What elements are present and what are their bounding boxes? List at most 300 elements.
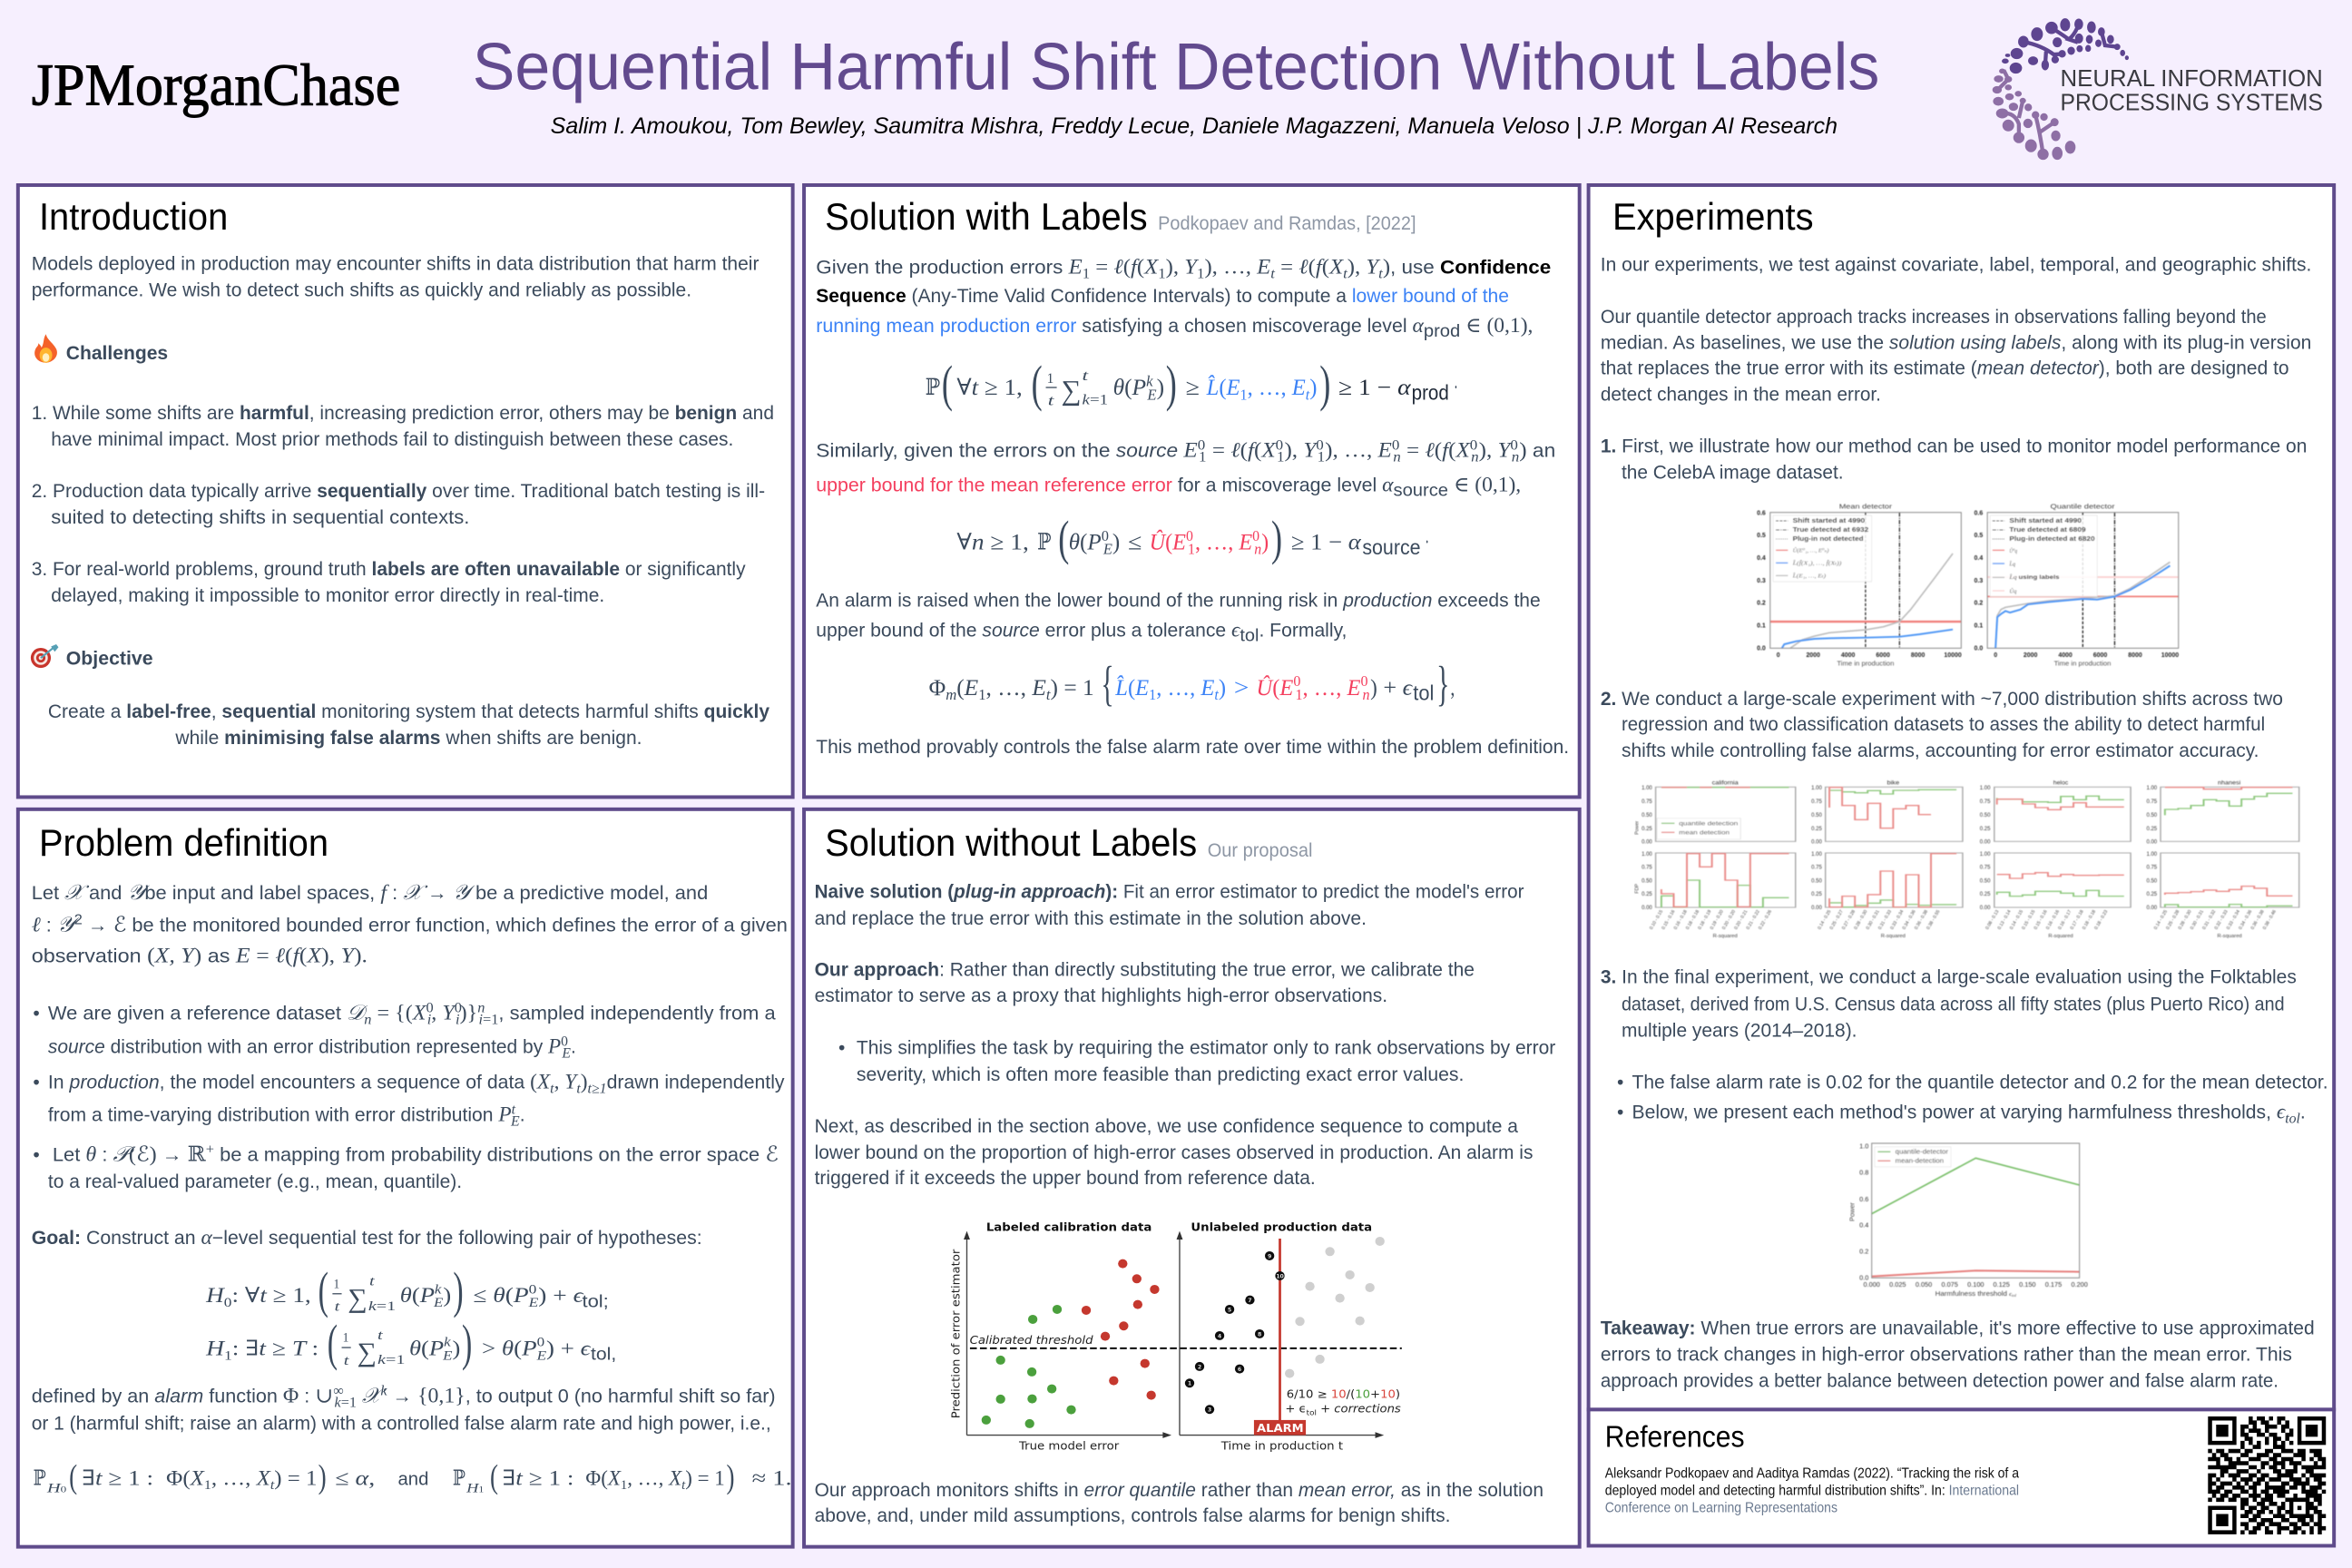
formula: hypotheses H0 and H1: ∑ xyxy=(357,1338,377,1367)
axis labels: R-squared xyxy=(1881,934,1906,939)
chart: quantile detector: 6000 xyxy=(2093,652,2107,659)
formula: hypotheses H0 and H1: t xyxy=(369,1274,376,1289)
chart: quantile detector: 0.0 xyxy=(1975,646,1983,652)
label: Our proposal: Our proposal xyxy=(1208,840,1312,861)
formula: false alarm and power conditions: ℙ xyxy=(34,1467,46,1490)
text: experiment 2: shifts while controlling false alarms, accounting for error estimator accuracy. xyxy=(1622,740,2259,761)
logo: Neural Information Processing Systems: PROCESSING SYSTEMS xyxy=(2061,91,2323,116)
formula: lower confidence sequence: ∀t ≥ 1, xyxy=(956,375,1023,400)
formula: hypotheses H0 and H1: 1 xyxy=(334,1277,339,1291)
text: next steps: triggered if it exceeds the upper bound from reference data. xyxy=(815,1168,1316,1189)
legend: mean detection xyxy=(1679,828,1730,836)
text: challenge list: suited to detecting shifts in sequential contexts. xyxy=(51,507,469,528)
formula: alarm function definition: tol xyxy=(1413,681,1434,705)
text: intro paragraph: Models deployed in production may encounter shifts in data distribution that harm their xyxy=(32,254,759,275)
icon: fire xyxy=(34,334,57,363)
green series xyxy=(1661,788,2292,907)
chart: quantile detector: L̂q xyxy=(2008,561,2016,567)
chart: power vs harmfulness threshold: 0.6 xyxy=(1859,1195,1868,1203)
formula: upper confidence bound: Û(E01, …, E0n) xyxy=(1150,528,1269,558)
formula: alarm function definition: + ϵ xyxy=(1383,675,1414,701)
numbered production points: 10 xyxy=(1276,1273,1284,1279)
formula: upper confidence bound: source xyxy=(1362,535,1421,559)
y tick labels: 0.75 xyxy=(1980,798,1991,805)
y tick labels: 0.50 xyxy=(1811,811,1822,818)
chart: mean detector: L̂(f̂(X₁), …, f̂(Xₜ)) xyxy=(1791,560,1841,567)
rotated tick labels: 0.34 - 0.36 xyxy=(2238,909,2253,931)
formula: false alarm and power conditions: ∃t ≥ 1 : xyxy=(503,1467,573,1490)
rotated tick labels: 0.08 - 0.13 xyxy=(1984,909,2000,931)
list: ranking bullet: • xyxy=(838,1037,845,1058)
formula: false alarm and power conditions: Φ(X1, …, Xt) = 1 xyxy=(585,1467,725,1493)
y tick labels: 0.75 xyxy=(1642,863,1652,870)
formula: hypotheses H0 and H1: tol, xyxy=(591,1345,616,1365)
y tick labels: 0.75 xyxy=(1980,863,1991,870)
list: assumptions: In production, the model encounters a sequence of data (Xt, Yt)t≥1drawn independently xyxy=(48,1070,785,1096)
y tick labels: 0.25 xyxy=(1811,890,1822,897)
formula: hypotheses H0 and H1: > θ(P0 E) + ϵ xyxy=(482,1335,592,1364)
formula: upper confidence bound: ≤ xyxy=(1128,530,1142,555)
y tick labels: 0.00 xyxy=(1811,904,1822,911)
formula: hypotheses H0 and H1: ( xyxy=(328,1316,338,1371)
heading: Unlabeled production data: Unlabeled production data xyxy=(1191,1221,1372,1234)
chart: mean detector: True detected at 6932 xyxy=(1793,527,1868,534)
chart: mean detector: 0.0 xyxy=(1757,646,1766,652)
text: alarm function: or 1 (harmful shift; raise an alarm) with a controlled false alarm rate and high power, i.e., xyxy=(32,1413,771,1434)
list: results bullets: The false alarm rate is 0.02 for the quantile detector and 0.2 for the mean detector. xyxy=(1632,1072,2328,1093)
x axis labels xyxy=(1018,1440,1343,1453)
formula: alarm function definition: L̂(E1, …, Et) xyxy=(1114,674,1226,703)
formula: false alarm and power conditions: ) xyxy=(726,1459,734,1495)
formula: hypotheses H0 and H1: θ(Pk E) xyxy=(409,1335,460,1364)
rotated tick labels: 0.28 - 0.30 xyxy=(2177,909,2193,931)
chart: power vs harmfulness threshold: 0.050 xyxy=(1916,1280,1932,1289)
chart: mean detector: 2000 xyxy=(1806,652,1820,659)
chart: power vs harmfulness threshold: 0.2 xyxy=(1859,1248,1868,1256)
rotated tick labels: 0.22 - 0.26 xyxy=(1758,909,1773,931)
y tick labels: 0.75 xyxy=(1642,798,1652,805)
chart: power vs harmfulness threshold: quantile-detector xyxy=(1896,1148,1949,1156)
chart: quantile detector: True detected at 6809 xyxy=(2009,527,2086,534)
formula: lower confidence sequence: k=1 xyxy=(1083,391,1108,407)
panel: Solution with Labels: · xyxy=(1425,530,1429,555)
formula: lower confidence sequence: L̂(E1, …, Et) xyxy=(1206,375,1317,404)
chart: mean detector: 0.6 xyxy=(1757,510,1766,516)
rotated tick labels: 0.20 - 0.21 xyxy=(1733,909,1749,931)
text: alarm rule: upper bound of the source error plus a tolerance ϵtol. Formally, xyxy=(816,619,1347,646)
chart: power vs harmfulness threshold: 0.8 xyxy=(1859,1169,1868,1177)
chart: power vs harmfulness threshold: 0.200 xyxy=(2071,1280,2088,1289)
list: assumptions: We are given a reference dataset 𝒟n = {(X0i, Y0i)}ni=1, sampled independently from a xyxy=(48,1000,776,1027)
formula: hypotheses H0 and H1: ) xyxy=(453,1263,464,1318)
y tick labels: 0.50 xyxy=(1642,877,1652,884)
text: challenge list: 1. While some shifts are harmful, increasing prediction error, others may be benign and xyxy=(32,403,774,424)
formula: upper confidence bound: ) xyxy=(1271,512,1282,565)
text: alarm rule xyxy=(816,591,1541,646)
chart: quantile detector: 10000 xyxy=(2161,652,2179,659)
axis labels: R-squared xyxy=(2048,934,2073,939)
text: our approach: Our approach: Rather than directly substituting the true error, we calibrate the xyxy=(815,959,1475,980)
chart: quantile detector: Plug-in detected at 6820 xyxy=(2009,536,2095,543)
legend: quantile detection xyxy=(1679,819,1739,827)
panel: Experiments xyxy=(1589,185,2334,1409)
chart: mean detector: 0.4 xyxy=(1757,555,1766,562)
list: results bullets xyxy=(1617,1072,2328,1126)
rotated tick labels: 0.27 - 0.28 xyxy=(1841,909,1857,931)
heading: Solution without Labels: Solution without Labels xyxy=(825,822,1197,864)
y tick labels: 0.25 xyxy=(1642,825,1652,832)
y tick labels: 1.00 xyxy=(1811,850,1822,858)
subplot titles: heloc xyxy=(2053,779,2068,786)
text: approach and baselines: detect changes in the mean error. xyxy=(1601,384,1881,405)
list: results bullets: • xyxy=(1617,1102,1623,1122)
text: experiment 1 xyxy=(1601,436,2307,483)
rotated tick labels: 0.16 - 0.18 xyxy=(1673,909,1689,931)
text: objective statement xyxy=(48,701,769,749)
rotated tick labels: 0.32 - 0.33 xyxy=(2213,909,2230,931)
text: closing statement: above, and, under mild assumptions, controls false alarms for benign shifts. xyxy=(815,1505,1451,1526)
formula: false alarm and power conditions: ( xyxy=(490,1459,498,1495)
rotated tick labels: 0.10 - 0.15 xyxy=(1649,909,1664,931)
text: challenge list: 2. Production data typically arrive sequentially over time. Traditional batch testing is ill- xyxy=(32,481,765,502)
text: citation: Aleksandr Podkopaev and Aaditya Ramdas (2022). “Tracking the risk of a xyxy=(1605,1465,2019,1481)
formula: lower confidence sequence: ) xyxy=(1319,356,1330,412)
y tick labels: 0.00 xyxy=(1980,838,1991,845)
chart: quantile detector: 0.6 xyxy=(1975,510,1983,516)
list: assumptions: from a time-varying distribution with error distribution PtE. xyxy=(48,1102,525,1130)
y tick labels: 0.75 xyxy=(2147,863,2157,870)
rotated tick labels: 0.38 - 0.46 xyxy=(2262,909,2278,931)
chart: quantile detector: Ûq xyxy=(2009,587,2017,594)
y tick labels: 0.00 xyxy=(1642,838,1652,845)
rotated tick labels: 0.30 - 0.31 xyxy=(1866,909,1881,931)
subplot titles: california xyxy=(1712,779,1739,786)
y tick labels: 0.25 xyxy=(2147,825,2157,832)
text: citation: deployed model and detecting harmful distribution shifts”. In: International xyxy=(1605,1483,2019,1498)
list: assumptions: source distribution with an error distribution represented by P0E. xyxy=(48,1034,576,1061)
chart: mean detector: Shift started at 4990 xyxy=(1793,518,1865,524)
chart: power vs harmfulness threshold: 1.0 xyxy=(1859,1142,1868,1151)
rotated tick labels: 0.38 - 0.55 xyxy=(1926,909,1941,931)
y tick labels: 1.00 xyxy=(1642,850,1652,858)
chart: power vs harmfulness threshold: 0.075 xyxy=(1941,1280,1958,1289)
numbered production points xyxy=(1185,1251,1285,1414)
y tick labels: 0.50 xyxy=(1980,877,1991,884)
list: ranking bullet: This simplifies the task by requiring the estimator only to rank observations by error xyxy=(857,1037,1555,1058)
text: closing statement: This method provably controls the false alarm rate over time within the problem definition. xyxy=(816,737,1569,758)
rotated tick labels: 0.31 - 0.33 xyxy=(1877,909,1893,931)
y tick labels: 1.00 xyxy=(1980,850,1991,858)
formula: false alarm and power conditions: ( xyxy=(69,1459,77,1495)
formula: lower confidence sequence: ≥ 1 − α xyxy=(1338,375,1411,400)
text: alarm function: defined by an alarm function Φ : ∪∞k=1 𝒳k → {0,1}, to output 0 (no harmful shift so far) xyxy=(32,1383,776,1411)
chart: quantile detector xyxy=(1975,503,2179,667)
text: next steps: Next, as described in the section above, we use confidence sequence to compute a xyxy=(815,1116,1518,1137)
list: results bullets: Below, we present each method's power at varying harmfulness thresholds, ϵtol. xyxy=(1632,1100,2306,1126)
chart: mean detector: Mean detector xyxy=(1839,503,1893,511)
icon: target xyxy=(31,644,58,668)
chart: quantile detector: Shift started at 4990 xyxy=(2009,518,2082,524)
text: takeaway: errors to track changes in high-error observations rather than the mean error. This xyxy=(1601,1344,2292,1365)
y tick labels: 0.75 xyxy=(1811,798,1822,805)
text: challenge list xyxy=(32,403,774,606)
chart: quantile detector: Quantile detector xyxy=(2050,503,2115,511)
chart: mean detector: 0.2 xyxy=(1757,601,1766,607)
text: our approach: estimator to serve as a proxy that highlights high-error observations. xyxy=(815,985,1387,1006)
chart: mean detector: 0 xyxy=(1777,652,1780,659)
y tick labels: 1.00 xyxy=(1642,784,1652,791)
logo: Neural Information Processing Systems xyxy=(1994,19,2323,159)
formula: lower confidence sequence: ( xyxy=(942,356,953,412)
rotated tick labels: 0.14 - 0.25 xyxy=(2153,909,2169,931)
text: intro paragraph: performance. We wish to detect such shifts as quickly and reliably as possible. xyxy=(32,279,691,300)
rotated tick labels: 0.14 - 0.25 xyxy=(1817,909,1832,931)
heading: Solution with Labels: Solution with Labels xyxy=(825,196,1148,238)
text: approach and baselines xyxy=(1601,307,2311,405)
text: experiment 1: the CelebA image dataset. xyxy=(1622,462,1844,483)
rotated tick labels: 0.33 - 0.34 xyxy=(1889,909,1905,931)
chart: power vs harmfulness threshold: Power xyxy=(1848,1202,1857,1221)
formula: alarm function definition: > xyxy=(1234,675,1249,701)
text: experiment 2: 2. We conduct a large-scale experiment with ~7,000 distribution shifts across two xyxy=(1601,689,2283,710)
list: assumptions: Let θ : 𝒫(ℰ) → ℝ+ be a mapping from probability distributions on the error space ℰ xyxy=(53,1142,779,1166)
formula: hypotheses H0 and H1: ∑ xyxy=(348,1283,368,1313)
formula: lower confidence sequence: θ(PkE) xyxy=(1113,373,1164,404)
chart: power vs harmfulness threshold: 0.000 xyxy=(1864,1280,1880,1289)
panel: Solution with Labels: · xyxy=(1454,375,1458,400)
heading: Objective: Objective xyxy=(66,648,153,669)
y tick labels: 0.25 xyxy=(2147,890,2157,897)
panel: References xyxy=(1589,1409,2334,1545)
grey future points xyxy=(1285,1237,1385,1378)
chart: power vs harmfulness threshold xyxy=(1848,1142,2088,1298)
formula: lower confidence sequence: ∑ xyxy=(1062,375,1081,407)
chart: mean detector xyxy=(1757,503,1962,667)
chart: mean detector: 0.3 xyxy=(1757,578,1766,584)
text: approach and baselines: median. As baselines, we use the solution using labels, along with its plug-in version xyxy=(1601,332,2311,353)
chart: power vs harmfulness threshold: 0.0 xyxy=(1859,1274,1868,1282)
rotated tick labels: 0.18 - 0.23 xyxy=(2093,909,2109,931)
rotated tick labels: 0.28 - 0.30 xyxy=(1853,909,1868,931)
list: assumptions: • xyxy=(33,1003,40,1024)
formula: false alarm and power conditions: ℙ xyxy=(453,1467,466,1490)
subplot titles: bike xyxy=(1887,779,1899,786)
y tick labels: 0.75 xyxy=(2147,798,2157,805)
threshold line xyxy=(970,1346,1402,1351)
formula: false alarm and power conditions: H1 xyxy=(466,1481,484,1495)
formula: lower confidence sequence: ) xyxy=(1166,356,1177,412)
y tick labels: 0.50 xyxy=(1642,811,1652,818)
y tick labels: 0.50 xyxy=(1980,811,1991,818)
chart: quantile detector: 0.3 xyxy=(1975,578,1983,584)
formula: false alarm and power conditions: H0 xyxy=(46,1481,66,1495)
chart: quantile detector: 8000 xyxy=(2128,652,2142,659)
formula: alarm function definition: Φm(E1, …, Et) = 1 xyxy=(929,675,1094,703)
text: experiments overview: In our experiments, we test against covariate, label, temporal, and geographic shifts. xyxy=(1601,254,2311,275)
y tick labels: 0.50 xyxy=(2147,811,2157,818)
list: ranking bullet: severity, which is often more feasible than predicting exact error values. xyxy=(857,1064,1464,1085)
text: citation xyxy=(1605,1465,2019,1515)
chart: quantile detector: L̂q using labels xyxy=(2008,574,2060,581)
formula: false alarm and power conditions: ) xyxy=(318,1459,327,1495)
text: production errors: running mean production error satisfying a chosen miscoverage level αprod ∈ (0,1), xyxy=(816,314,1533,341)
logo: JPMorganChase: JPMorganChase xyxy=(32,53,400,119)
formula: false alarm and power conditions: Φ(X1, …, Xt) = 1 xyxy=(166,1467,317,1493)
chart: quantile detector: 2000 xyxy=(2024,652,2037,659)
list: assumptions: • xyxy=(33,1144,40,1165)
chart: power vs harmfulness threshold: 0.4 xyxy=(1859,1221,1868,1230)
y tick labels: 0.00 xyxy=(1980,904,1991,911)
rotated tick labels: 0.18 - 0.18 xyxy=(2082,909,2097,931)
red points xyxy=(1082,1259,1160,1400)
red series xyxy=(1661,788,2292,907)
axis labels: R-squared xyxy=(1713,934,1738,939)
authors: Salim I. Amoukou, Tom Bewley, Saumitra Mishra, Freddy Lecue, Daniele Magazzeni, Manuela Veloso | J.P. Morgan AI Research xyxy=(551,113,1838,139)
y tick labels xyxy=(1642,784,2157,911)
formula: hypotheses H0 and H1: ( xyxy=(318,1263,328,1318)
axes xyxy=(964,1231,1384,1438)
legend xyxy=(1657,818,1740,839)
y tick labels: 0.00 xyxy=(2147,838,2157,845)
text: naive solution: and replace the true error with this estimate in the solution above. xyxy=(815,908,1367,929)
text: citation: Conference on Learning Representations xyxy=(1605,1500,1838,1515)
icon: QR code xyxy=(2207,1415,2328,1536)
y tick labels: 1.00 xyxy=(2147,784,2157,791)
formula: hypotheses H0 and H1: tol; xyxy=(582,1292,609,1311)
chart: mean detector: Plug-in not detected xyxy=(1793,536,1864,543)
rotated tick labels: Power xyxy=(1634,820,1640,835)
y tick labels: 0.25 xyxy=(1811,825,1822,832)
numbered production points: 7 xyxy=(1248,1298,1252,1304)
text: goal: Goal: Construct an α−level sequential test for the following pair of hypotheses: xyxy=(32,1226,702,1250)
panel: Solution without Labels xyxy=(804,809,1580,1547)
y tick labels: 0.00 xyxy=(2147,904,2157,911)
text: experiment 3: multiple years (2014–2018). xyxy=(1622,1020,1857,1041)
heading: Challenges: Challenges xyxy=(66,343,168,364)
chart: quantile detector: 4000 xyxy=(2058,652,2073,659)
formula: upper confidence bound xyxy=(956,512,1429,565)
text: our approach xyxy=(815,959,1475,1006)
formula: hypotheses H0 and H1: k=1 xyxy=(368,1299,396,1314)
chart: mean detector: 10000 xyxy=(1944,652,1962,659)
list: assumptions: • xyxy=(33,1072,40,1093)
inequality annotation: + ϵtol + corrections xyxy=(1285,1403,1401,1416)
list: assumptions: to a real-valued parameter (e.g., mean, quantile). xyxy=(48,1171,462,1192)
chart: quantile detector: Û⁰q xyxy=(2009,547,2018,554)
formula: false alarm and power conditions xyxy=(34,1459,792,1495)
formula: lower confidence sequence: 1 xyxy=(1047,370,1054,387)
y tick labels: 0.75 xyxy=(1811,863,1822,870)
chart: power vs harmfulness threshold: 0.175 xyxy=(2045,1280,2062,1289)
y axis label: Prediction of error estimator xyxy=(949,1249,963,1418)
numbered production points: 2 xyxy=(1198,1364,1201,1370)
formula: lower confidence sequence: ℙ xyxy=(926,375,940,400)
threshold label: Calibrated threshold xyxy=(970,1334,1093,1347)
alarm badge: ALARM xyxy=(1257,1422,1304,1435)
rotated tick labels: 0.13 - 0.14 xyxy=(1997,909,2013,931)
y tick labels: 0.25 xyxy=(1642,890,1652,897)
chart: power vs harmfulness threshold: Harmfulness threshold ϵtol xyxy=(1936,1289,2017,1298)
rotated tick labels: 0.16 - 0.16 xyxy=(2045,909,2061,931)
chart: mean detector: Û(E⁰₁, …, E⁰ₙ) xyxy=(1793,547,1828,554)
y tick labels: 1.00 xyxy=(1811,784,1822,791)
formula: upper confidence bound: ℙ xyxy=(1037,530,1052,555)
rotated tick labels: 0.19 - 0.20 xyxy=(1710,909,1725,931)
text: experiment 1: 1. First, we illustrate how our method can be used to monitor model performance on xyxy=(1601,436,2307,456)
text: source errors: Similarly, given the errors on the source E01 = ℓ(f(X01), Y01), …, E0n = ℓ(f(X0n), Y0n) an xyxy=(816,437,1555,465)
rotated tick labels: 0.14 - 0.15 xyxy=(2009,909,2024,931)
text: next steps: lower bound on the proportion of high-error cases observed in production. An alarm is xyxy=(815,1142,1533,1163)
text: definitions of spaces and error xyxy=(32,881,788,967)
rotated tick labels: 0.21 - 0.22 xyxy=(1746,909,1761,931)
text: closing statement xyxy=(815,1480,1544,1526)
chart: quantile detector: 0.1 xyxy=(1975,623,1983,630)
rotated tick labels: 0.15 - 0.16 xyxy=(1661,909,1677,931)
text: experiment 3: dataset, derived from U.S. Census data across all fifty states (plus Puerto Rico) and xyxy=(1622,994,2285,1014)
formula: alarm function definition: } xyxy=(1436,657,1449,711)
citation: Podkopaev and Ramdas: Podkopaev and Ramdas, [2022] xyxy=(1158,213,1416,234)
text: source errors: upper bound for the mean reference error for a miscoverage level αsource ∈ (0,1), xyxy=(816,473,1521,500)
formula: hypotheses H0 and H1: θ(Pk E) xyxy=(400,1282,451,1310)
inequality annotation: 6/10 ≥ 10/(10+10) xyxy=(1287,1388,1400,1401)
x axis labels: True model error xyxy=(1018,1440,1120,1453)
chart: mean detector: 0.1 xyxy=(1757,623,1766,630)
formula: lower confidence sequence xyxy=(926,356,1458,412)
y tick labels: 0.25 xyxy=(1980,890,1991,897)
text: challenge list: 3. For real-world problems, ground truth labels are often unavailable or significantly xyxy=(32,559,746,580)
text: closing statement: Our approach monitors shifts in error quantile rather than mean error, as in the solution xyxy=(815,1480,1544,1501)
text: production errors xyxy=(816,256,1551,341)
rotated tick labels: 0.25 - 0.28 xyxy=(2165,909,2180,931)
text: definitions of spaces and error: observation (X, Y ) as E = ℓ(f(X), Y). xyxy=(32,944,368,967)
axis labels: R-squared xyxy=(2218,934,2242,939)
formula: hypotheses H0 and H1: t xyxy=(377,1328,384,1343)
formula: false alarm and power conditions: ≤ α, xyxy=(335,1467,375,1490)
formula: hypotheses H0 and H1: t xyxy=(344,1353,349,1368)
axes frames xyxy=(1656,787,2299,907)
rotated tick labels: 0.15 - 0.16 xyxy=(2034,909,2049,931)
chart: mean detector: Time in production xyxy=(1837,661,1895,667)
y tick labels: 0.25 xyxy=(1980,825,1991,832)
formula: upper confidence bound: ∀n ≥ 1, xyxy=(956,530,1029,555)
rotated tick labels: 0.33 - 0.34 xyxy=(2226,909,2241,931)
y tick labels: 0.00 xyxy=(1642,904,1652,911)
chart: quantile detector: 0 xyxy=(1994,652,1997,659)
y tick labels: 0.50 xyxy=(1811,877,1822,884)
formula: lower confidence sequence: ( xyxy=(1032,356,1043,412)
text: experiment 3 xyxy=(1601,967,2297,1041)
formula: upper confidence bound: ( xyxy=(1058,512,1069,565)
chart: power vs harmfulness threshold: 0.100 xyxy=(1967,1280,1984,1289)
text: intro paragraph xyxy=(32,254,759,300)
numbered production points: 1 xyxy=(1188,1381,1191,1387)
chart: quantile detector: 0.4 xyxy=(1975,555,1983,562)
formula: hypotheses H0 and H1: 1 xyxy=(343,1330,348,1345)
axis labels xyxy=(1713,934,2242,939)
chart: mean and quantile detector lines xyxy=(1757,503,2179,667)
rotated tick labels: 0.36 - 0.38 xyxy=(2249,909,2266,931)
text: naive solution xyxy=(815,881,1524,929)
text: experiment 2 xyxy=(1601,689,2283,761)
inequality annotation xyxy=(1285,1388,1401,1416)
heading: References: References xyxy=(1605,1420,1745,1454)
rotated tick labels: 0.30 - 0.31 xyxy=(2190,909,2205,931)
numbered production points: 5 xyxy=(1228,1307,1231,1313)
subplot titles xyxy=(1712,779,2240,786)
chart: power vs harmfulness threshold: mean-detection xyxy=(1896,1157,1944,1165)
text: challenge list: have minimal impact. Most prior methods fail to distinguish between these cases. xyxy=(51,429,733,450)
title: Sequential Harmful Shift Detection Without Labels xyxy=(473,28,1879,103)
